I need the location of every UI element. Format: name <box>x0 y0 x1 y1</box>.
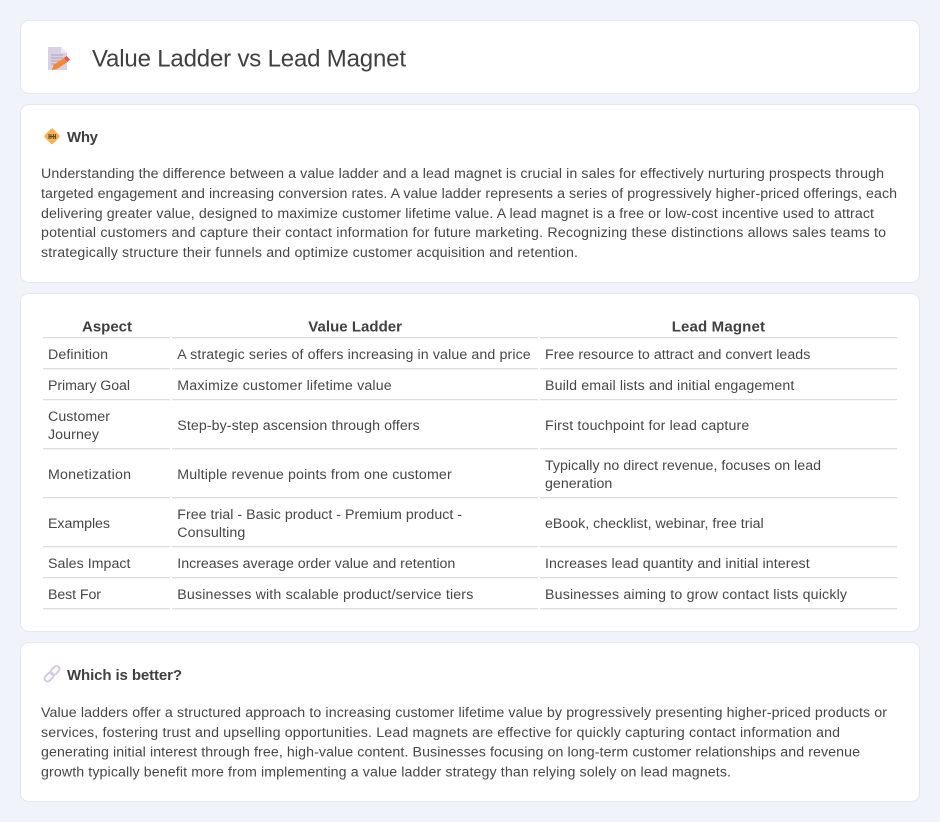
panel: comparison table <box>20 294 920 632</box>
text block: verdict <box>41 705 887 780</box>
row: primary goal: Build email lists and initial engagement <box>545 378 794 394</box>
heading: why: Why <box>67 129 99 146</box>
table header <box>82 318 765 336</box>
row: customer journey: Customer <box>48 409 110 425</box>
row: customer journey: Journey <box>48 427 100 443</box>
row: primary goal: Primary Goal <box>48 378 130 394</box>
row: definition <box>48 347 810 363</box>
row: best for: Best For <box>48 587 101 603</box>
text block: why explanation: strategically structure their funnels and optimize customer acquisition and retention. <box>41 245 578 261</box>
row: customer journey <box>48 409 749 443</box>
table header: Value Ladder <box>308 318 402 336</box>
row: monetization: Multiple revenue points from one customer <box>177 467 452 483</box>
text block: why explanation: delivering greater value, designed to maximize customer lifetime value. A lead magnet is a free or low-cost incentive used to attract <box>41 206 874 222</box>
panel: which is better <box>20 642 920 802</box>
row: examples: Examples <box>48 516 110 532</box>
row: customer journey: Step-by-step ascension through offers <box>177 418 420 434</box>
row: sales impact: Increases average order value and retention <box>177 556 455 572</box>
text block: verdict: generating initial interest through free, high-value content. Businesses focusing on long-term customer relationships and revenue <box>41 744 860 760</box>
row: primary goal <box>48 378 794 394</box>
row: definition: Free resource to attract and convert leads <box>545 347 810 363</box>
row: customer journey: First touchpoint for lead capture <box>545 418 749 434</box>
row: examples: Free trial - Basic product - Premium product - <box>177 507 462 523</box>
row: examples: eBook, checklist, webinar, free trial <box>545 516 764 532</box>
text block: verdict: growth typically benefit more from implementing a value ladder strategy than relying solely on lead magnets. <box>41 764 731 780</box>
row: best for: Businesses with scalable product/service tiers <box>177 587 473 603</box>
table header: Lead Magnet <box>672 318 765 336</box>
row: definition: Definition <box>48 347 108 363</box>
title: Value Ladder vs Lead Magnet <box>92 46 406 72</box>
panel: why <box>20 104 920 282</box>
row: sales impact <box>48 556 810 572</box>
row: monetization: Typically no direct revenue, focuses on lead <box>545 458 821 474</box>
row: examples <box>48 507 764 541</box>
table header: Aspect <box>82 318 132 336</box>
row: monetization: generation <box>545 476 612 492</box>
row: monetization: Monetization <box>48 467 131 483</box>
row: monetization <box>48 458 821 492</box>
text block: why explanation: targeted engagement and increasing conversion rates. A value ladder represents a series of progressively higher-priced offerings, each <box>41 186 897 202</box>
row: sales impact: Increases lead quantity and initial interest <box>545 556 810 572</box>
row: best for <box>48 587 848 603</box>
row: sales impact: Sales Impact <box>48 556 131 572</box>
text block: verdict: Value ladders offer a structured approach to increasing customer lifetime value by progressively presenting higher-priced products or <box>41 705 887 721</box>
text block: why explanation: potential customers and capture their contact information for future marketing. Recognizing these distinctions allows sales teams to <box>41 225 886 241</box>
text block: verdict: services, fostering trust and upselling opportunities. Lead magnets are effective for quickly capturing contact information and <box>41 725 840 741</box>
panel: title card <box>20 20 920 94</box>
row: definition: A strategic series of offers increasing in value and price <box>177 347 531 363</box>
row: examples: Consulting <box>177 525 245 541</box>
row: primary goal: Maximize customer lifetime value <box>177 378 392 394</box>
text block: why explanation: Understanding the difference between a value ladder and a lead magnet is crucial in sales for effectively nurturing prospects through <box>41 166 884 182</box>
icon: link <box>43 665 61 683</box>
text block: why explanation <box>41 166 897 261</box>
icon: warning diamond <box>44 128 60 145</box>
row: best for: Businesses aiming to grow contact lists quickly <box>545 587 848 603</box>
heading: which is better: Which is better? <box>67 667 182 684</box>
icon: document with pencil <box>48 47 70 70</box>
